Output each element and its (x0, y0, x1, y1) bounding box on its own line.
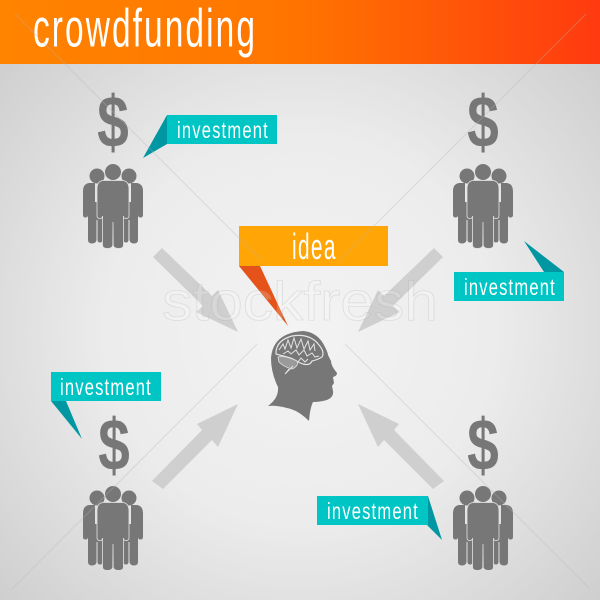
callout: idea: idea (292, 227, 336, 268)
callout: investment bottom right: investment (327, 499, 418, 525)
brain (276, 335, 323, 374)
icon: people bottom left (83, 486, 143, 570)
callout: investment top right: investment (464, 275, 555, 301)
icon: dollar top right: $ (467, 81, 499, 163)
callout: investment top left: investment (177, 118, 268, 144)
icon: people bottom right (453, 486, 513, 570)
icon: dollar bottom left: $ (98, 404, 130, 486)
icon: people top left (83, 164, 143, 248)
icon: head with brain (268, 331, 337, 421)
arrow: top left (153, 248, 238, 332)
watermark: stockfresh (162, 270, 438, 332)
callout: idea (239, 226, 388, 326)
arrow: bottom left (152, 404, 238, 489)
callout: investment bottom left (51, 372, 161, 439)
callout: investment bottom left: investment (60, 375, 151, 401)
icon: dollar top left: $ (97, 81, 129, 163)
icon: people top right (453, 164, 513, 248)
icon: dollar bottom right: $ (467, 404, 499, 486)
header banner (0, 0, 600, 64)
head silhouette (268, 331, 337, 421)
arrow: bottom right (358, 404, 444, 489)
callout: investment top right (454, 241, 564, 301)
callout: investment bottom right (317, 496, 442, 540)
callout: investment top left (143, 115, 277, 158)
arrow: top right (358, 248, 443, 332)
